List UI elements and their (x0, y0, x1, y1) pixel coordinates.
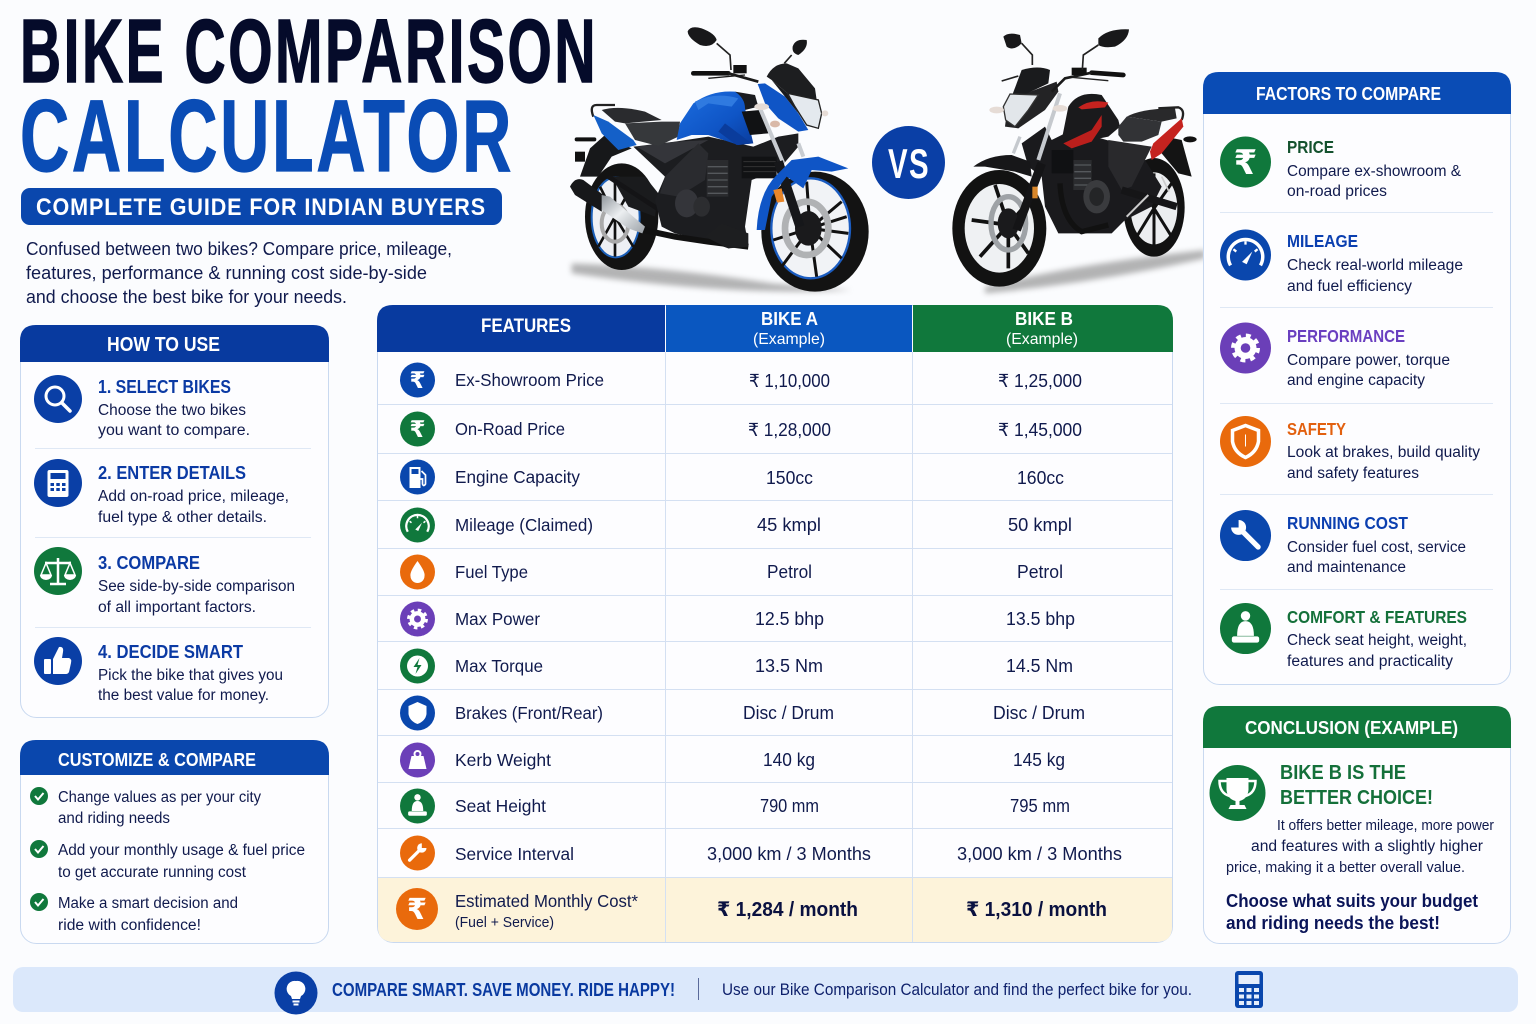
row: on-road price (400, 412, 1082, 446)
VS badge: VS (888, 140, 930, 187)
conclusion header: CONCLUSION (EXAMPLE) (1245, 717, 1458, 738)
row: estimated monthly cost (396, 888, 1107, 931)
factor: performance: Compare power, torque (1287, 352, 1450, 369)
step 4 text: the best value for money. (98, 687, 269, 704)
factor: price: PRICE (1287, 137, 1334, 157)
row: ex-showroom price: ₹ (409, 367, 426, 393)
row: max torque: 13.5 Nm (755, 656, 823, 676)
factor: performance: PERFORMANCE (1287, 326, 1405, 346)
row: ex-showroom price (400, 362, 1082, 398)
factor: safety (1220, 416, 1480, 482)
step 2 text: Add on-road price, mileage, (98, 488, 289, 505)
row: brakes: Disc / Drum (743, 703, 834, 723)
row: seat height: 790 mm (760, 796, 819, 816)
row: on-road price: On-Road Price (455, 419, 565, 439)
step 2 text: 2. ENTER DETAILS (98, 463, 246, 483)
row: kerb weight: 145 kg (1013, 750, 1065, 770)
check item 3: ride with confidence! (58, 917, 201, 934)
row: max torque (400, 648, 1073, 684)
row: on-road price: ₹ (409, 416, 426, 442)
subtitle pill: COMPLETE GUIDE FOR INDIAN BUYERS (36, 194, 486, 221)
row: max torque: 14.5 Nm (1006, 656, 1073, 676)
row: kerb weight: Kerb Weight (455, 750, 551, 770)
conclusion heading (1280, 761, 1433, 809)
comparison table (377, 305, 1173, 942)
title: BIKE COMPARISON (20, 2, 598, 102)
factor: running cost: Consider fuel cost, service (1287, 539, 1466, 556)
factor: running cost: RUNNING COST (1287, 513, 1408, 533)
factor: mileage: MILEAGE (1287, 231, 1358, 251)
conclusion body: and features with a slightly higher (1251, 838, 1483, 855)
step 2 text (98, 463, 289, 526)
row: estimated monthly cost: ₹ (407, 894, 427, 926)
factor: running cost: and maintenance (1287, 559, 1406, 576)
check item 3 (30, 893, 238, 934)
step 4 text (98, 642, 283, 704)
step 3 text: See side-by-side comparison (98, 578, 295, 595)
row: service interval: Service Interval (455, 844, 574, 864)
row: kerb weight: 140 kg (763, 750, 815, 770)
factor: comfort and features: COMFORT & FEATURES (1287, 607, 1467, 627)
highlight row background (378, 877, 1172, 942)
check item 1: and riding needs (58, 810, 170, 827)
step 1 text: you want to compare. (98, 422, 250, 439)
row: ex-showroom price: ₹ 1,10,000 (749, 371, 830, 391)
row: max power: 12.5 bhp (755, 609, 824, 629)
row: service interval (400, 836, 1122, 870)
intro text: features, performance & running cost side-by-side (26, 263, 427, 283)
factor: safety: SAFETY (1287, 419, 1346, 439)
icon: magnifier (34, 375, 82, 423)
intro text: and choose the best bike for your needs. (26, 287, 347, 307)
row: on-road price: ₹ 1,45,000 (998, 420, 1082, 440)
factor: price (1220, 136, 1462, 200)
factor: comfort and features: Check seat height, weight, (1287, 632, 1467, 649)
conclusion body (1226, 818, 1494, 876)
factors header: FACTORS TO COMPARE (1256, 83, 1441, 104)
header: bike B: BIKE B (1015, 309, 1073, 329)
header: bike B: (Example) (1006, 331, 1078, 348)
row: ex-showroom price: Ex-Showroom Price (455, 370, 604, 390)
how to use header (20, 325, 329, 362)
row: max power (400, 602, 1075, 636)
conclusion body: price, making it a better overall value. (1226, 860, 1465, 876)
row: brakes: Disc / Drum (993, 703, 1085, 723)
check item 2 (30, 840, 305, 881)
icon: trophy (1210, 765, 1266, 821)
row: estimated monthly cost: Estimated Monthly Cost* (455, 891, 638, 911)
how to use header: HOW TO USE (107, 334, 220, 356)
factor: comfort and features (1220, 603, 1467, 670)
row: estimated monthly cost: ₹ 1,284 / month (717, 899, 858, 921)
row: fuel type (400, 554, 1063, 590)
header: features (377, 305, 665, 352)
header: bike B (913, 305, 1173, 352)
intro text (26, 239, 452, 307)
check item 3: Make a smart decision and (58, 895, 238, 912)
row: mileage: 45 kmpl (757, 515, 821, 535)
row: mileage: 50 kmpl (1008, 515, 1072, 535)
row: brakes: Brakes (Front/Rear) (455, 703, 603, 723)
check item 1: Change values as per your city (58, 789, 261, 806)
conclusion call to action (1226, 891, 1478, 933)
icon: thumbs up (34, 637, 82, 685)
header: bike A: BIKE A (761, 309, 818, 329)
row: fuel type: Petrol (1017, 562, 1063, 582)
conclusion header (1203, 706, 1511, 748)
check item 1 (30, 787, 261, 827)
title: CALCULATOR (20, 79, 514, 193)
row: max power: 13.5 bhp (1006, 609, 1075, 629)
row: fuel type: Petrol (767, 562, 812, 582)
blue bike illustration (570, 27, 869, 292)
conclusion heading: BETTER CHOICE! (1280, 786, 1433, 809)
row: seat height (400, 789, 1070, 823)
panel: how to use (20, 325, 329, 718)
step 4 text: 4. DECIDE SMART (98, 642, 243, 662)
factor: running cost (1220, 510, 1466, 576)
row: service interval: 3,000 km / 3 Months (957, 844, 1122, 864)
row: engine capacity: 150cc (766, 468, 813, 488)
icon: scales (34, 547, 82, 595)
row: kerb weight (400, 742, 1065, 778)
step 3 text: of all important factors. (98, 599, 256, 616)
row: engine capacity (400, 460, 1064, 494)
icon: light bulb (274, 972, 318, 1014)
check item 2: Add your monthly usage & fuel price (58, 842, 305, 859)
row: max torque: Max Torque (455, 656, 543, 676)
conclusion call to action: and riding needs the best! (1226, 913, 1440, 933)
factor: performance (1220, 322, 1450, 389)
row: seat height: 795 mm (1010, 796, 1070, 816)
row: seat height: Seat Height (455, 796, 546, 816)
factor: comfort and features: features and practicality (1287, 653, 1453, 670)
step 3 text (98, 553, 295, 616)
banner slogan: COMPARE SMART. SAVE MONEY. RIDE HAPPY! (332, 980, 675, 1000)
row: max power: Max Power (455, 609, 540, 629)
factor: price: ₹ (1234, 144, 1257, 182)
factor: performance: and engine capacity (1287, 372, 1425, 389)
step 3 text: 3. COMPARE (98, 553, 200, 573)
conclusion heading: BIKE B IS THE (1280, 761, 1406, 784)
subtitle pill (21, 188, 502, 225)
step 2 text: fuel type & other details. (98, 509, 267, 526)
factor: price: on-road prices (1287, 183, 1387, 200)
factor: mileage: Check real-world mileage (1287, 257, 1463, 274)
row: on-road price: ₹ 1,28,000 (748, 420, 831, 440)
row: service interval: 3,000 km / 3 Months (707, 844, 871, 864)
row: engine capacity: 160cc (1017, 468, 1064, 488)
conclusion call to action: Choose what suits your budget (1226, 891, 1478, 911)
header: features: FEATURES (481, 315, 571, 337)
VS badge (872, 126, 945, 199)
row: estimated monthly cost: (Fuel + Service) (455, 915, 554, 931)
row: brakes (400, 696, 1085, 730)
row: mileage (400, 508, 1072, 542)
factors header (1203, 72, 1511, 114)
step 4 text: Pick the bike that gives you (98, 667, 283, 684)
factor: price: Compare ex-showroom & (1287, 163, 1462, 180)
bottom banner (13, 967, 1518, 1014)
row: mileage: Mileage (Claimed) (455, 515, 593, 535)
icon: calculator (1235, 971, 1263, 1008)
panel: conclusion (1203, 706, 1511, 944)
customize header: CUSTOMIZE & COMPARE (58, 749, 256, 770)
row: engine capacity: Engine Capacity (455, 467, 580, 487)
title (20, 2, 598, 193)
factor: safety: and safety features (1287, 465, 1419, 482)
conclusion body: It offers better mileage, more power (1277, 818, 1494, 834)
black bike illustration (952, 29, 1205, 293)
step 1 text: Choose the two bikes (98, 402, 246, 419)
row: ex-showroom price: ₹ 1,25,000 (998, 371, 1082, 391)
customize header (20, 740, 329, 775)
row: estimated monthly cost: ₹ 1,310 / month (966, 899, 1107, 921)
factor: safety: Look at brakes, build quality (1287, 444, 1480, 461)
panel: customize and compare (20, 740, 329, 944)
factor: mileage: and fuel efficiency (1287, 278, 1412, 295)
banner message: Use our Bike Comparison Calculator and find the perfect bike for you. (722, 981, 1192, 999)
header: bike A: (Example) (753, 331, 825, 348)
header: bike A (666, 305, 912, 352)
panel: factors to compare (1203, 72, 1511, 684)
factor: mileage (1220, 230, 1463, 295)
icon: calculator (34, 459, 82, 507)
row: fuel type: Fuel Type (455, 562, 528, 582)
step 1 text (98, 377, 250, 439)
intro text: Confused between two bikes? Compare price, mileage, (26, 239, 452, 259)
check item 2: to get accurate running cost (58, 864, 247, 881)
step 1 text: 1. SELECT BIKES (98, 377, 231, 397)
